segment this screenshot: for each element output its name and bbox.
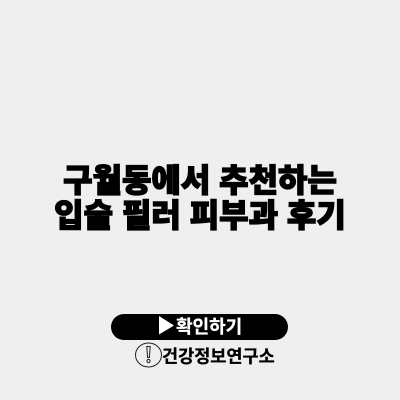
icon: play triangle <box>159 316 174 334</box>
logo: 건강정보연구소 <box>136 343 275 367</box>
logo: 건강정보연구소: 건강정보연구소 <box>162 346 275 366</box>
title: 구월동에서 추천하는 <box>63 162 337 198</box>
title <box>54 162 346 234</box>
button: 확인하기: 확인하기 <box>176 317 242 337</box>
icon: exclamation circle <box>136 343 162 367</box>
button: 확인하기 <box>111 314 288 340</box>
title: 입술 필러 피부과 후기 <box>54 198 346 234</box>
